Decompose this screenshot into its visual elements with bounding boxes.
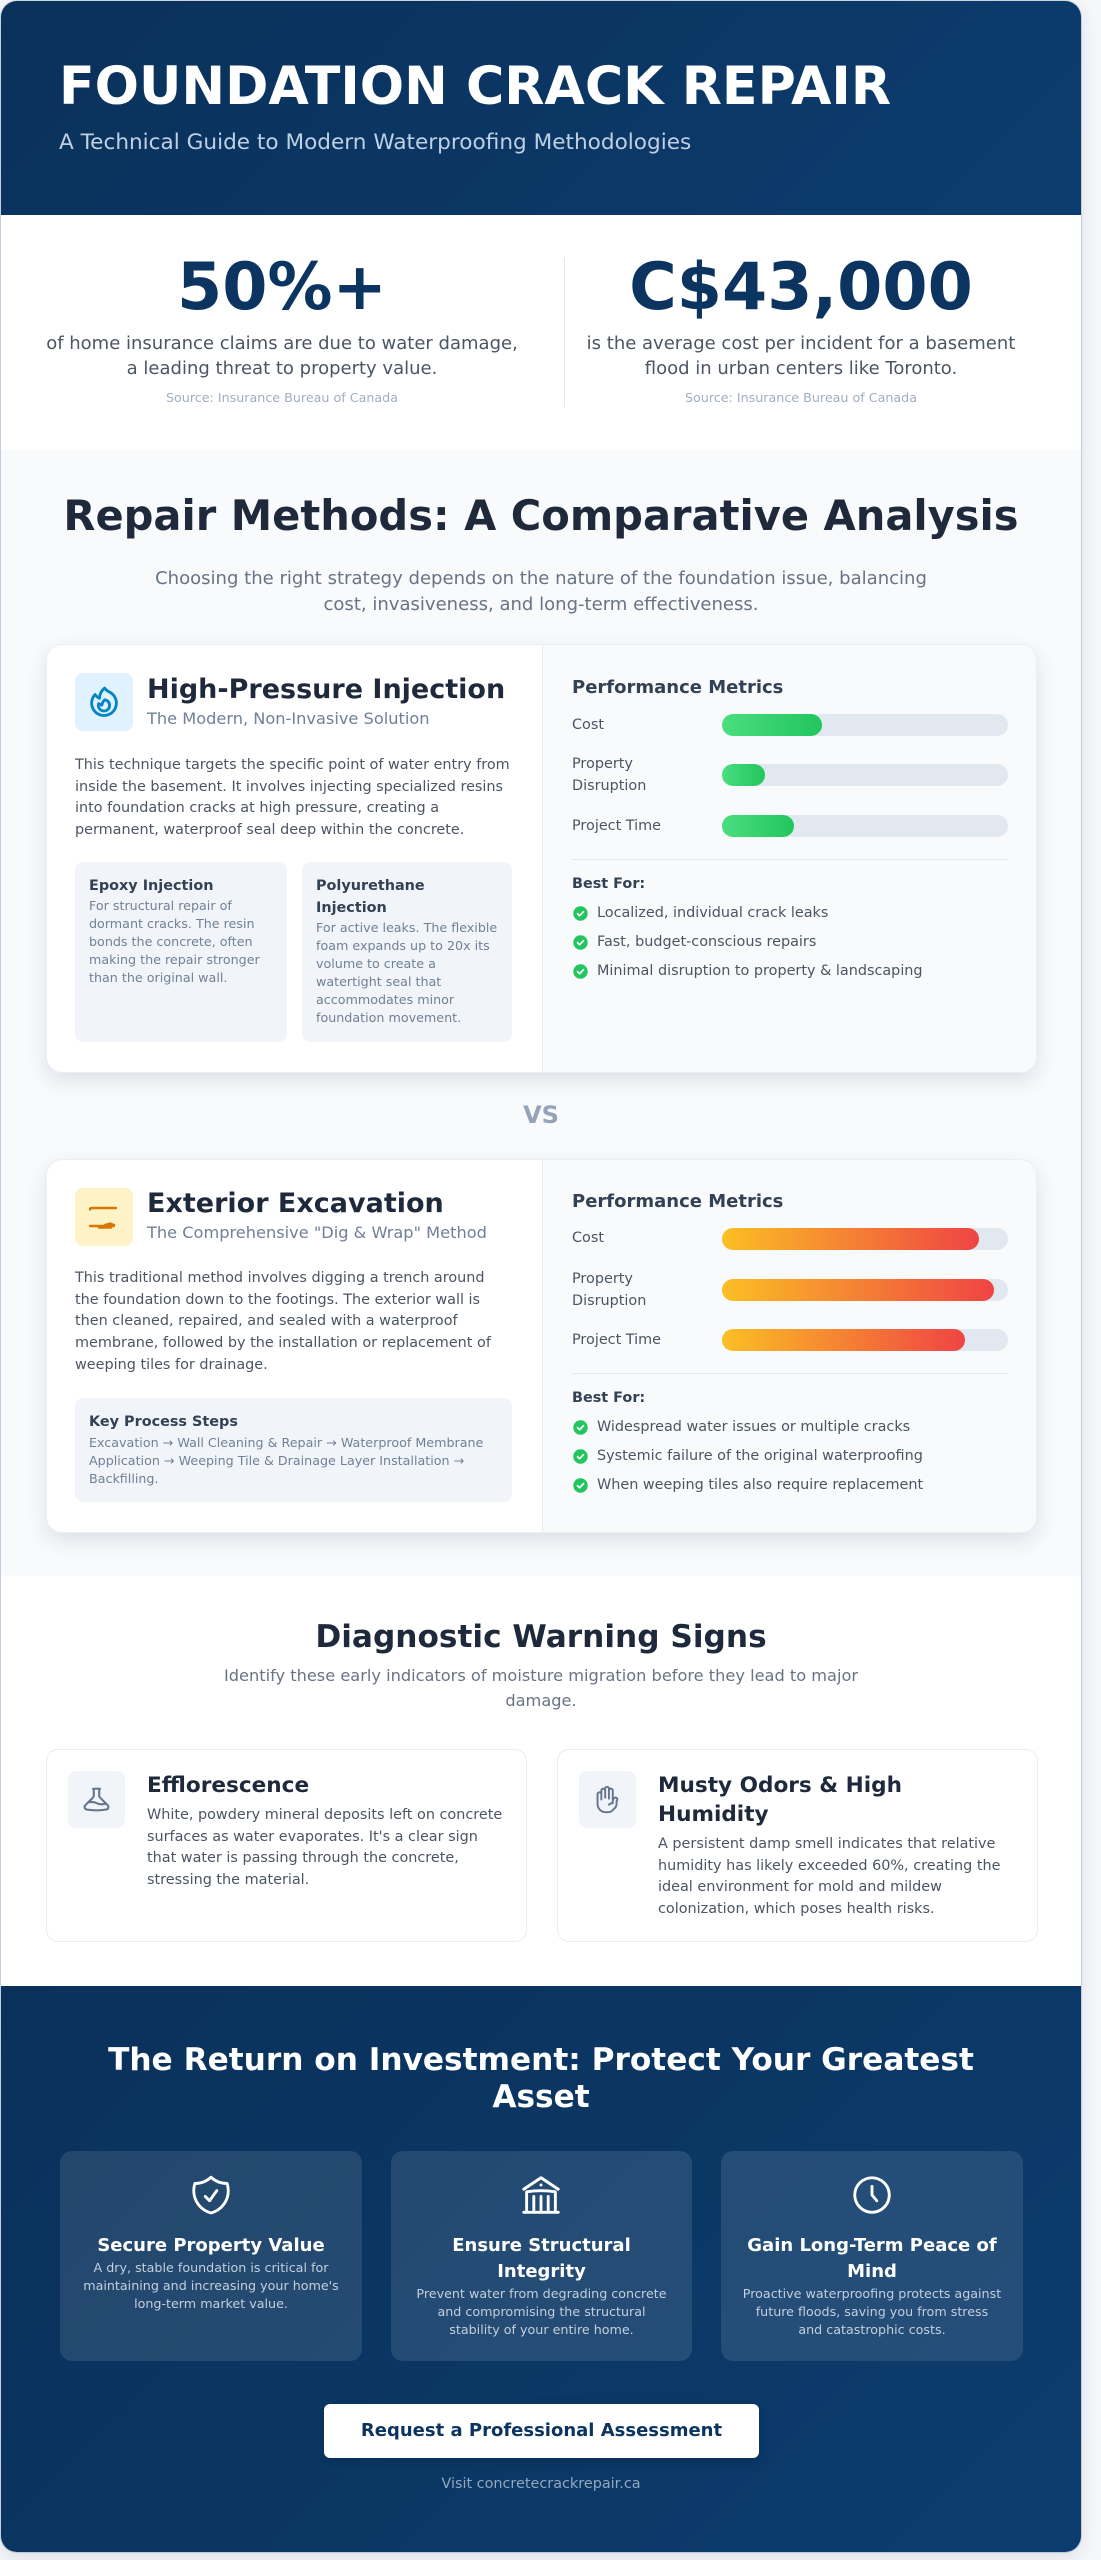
icon: columns building xyxy=(522,2176,560,2214)
bar: property disruption 95% xyxy=(722,1279,1008,1301)
heading: return on investment: Asset xyxy=(492,2078,590,2114)
card text xyxy=(147,1807,502,1888)
heading: return on investment xyxy=(108,2042,974,2114)
method description xyxy=(74,1270,492,1373)
benefit title: Integrity xyxy=(497,2261,586,2282)
sub-card text: For structural repair of xyxy=(89,898,232,913)
metric label: cost: Cost xyxy=(572,717,604,733)
section heading: repair methods: Repair Methods: A Comparative Analysis xyxy=(63,491,1019,540)
benefit text xyxy=(83,2260,339,2311)
benefit text: maintaining and increasing your home's xyxy=(83,2278,339,2293)
sub-card text xyxy=(316,920,497,1025)
sub-card: epoxy injection xyxy=(75,862,287,1042)
sub-card title: Injection xyxy=(316,900,387,916)
sub-card title xyxy=(316,878,425,916)
benefit title: Secure Property Value xyxy=(97,2235,325,2256)
subtitle: A Technical Guide to Modern Waterproofing Methodologies xyxy=(59,130,691,155)
benefit text: Proactive waterproofing protects against xyxy=(743,2286,1001,2301)
card title: High-Pressure Injection xyxy=(147,674,505,705)
sub-card text: watertight seal that xyxy=(316,974,441,989)
benefit: structural integrity xyxy=(391,2151,692,2361)
method description: This traditional method involves digging a trench around xyxy=(75,1270,485,1286)
benefit title xyxy=(747,2235,997,2282)
card text: ideal environment for mold and mildew xyxy=(658,1879,942,1895)
sub-card text: bonds the concrete, often xyxy=(89,934,253,949)
icon: clock xyxy=(853,2176,891,2214)
card text: stressing the material. xyxy=(147,1872,309,1888)
sub-card text: foundation movement. xyxy=(316,1010,461,1025)
stat description: is the average cost per incident for a basement xyxy=(587,333,1015,354)
stat description: of home insurance claims are due to water damage, xyxy=(46,333,518,354)
card title: Efflorescence xyxy=(147,1773,309,1798)
card: high-pressure injection xyxy=(46,644,1037,1073)
icon: flame xyxy=(75,673,133,731)
card text: surfaces as water evaporates. It's a clear sign xyxy=(147,1829,478,1845)
benefit text: future floods, saving you from stress xyxy=(756,2304,988,2319)
benefit title xyxy=(452,2235,631,2282)
benefit: secure property value xyxy=(60,2151,362,2361)
metric label: project time: Project Time xyxy=(572,818,661,834)
heading: return on investment: The Return on Investment: Protect Your Greatest xyxy=(108,2042,974,2078)
best for heading: Best For: xyxy=(572,1390,645,1406)
bar: cost 35% xyxy=(722,714,1008,736)
intro: diagnostic warning signs: Identify these early indicators of moisture migration before they lead to major xyxy=(224,1666,858,1685)
stat source: Source: Insurance Bureau of Canada xyxy=(685,390,917,405)
icon: shield check xyxy=(192,2176,230,2214)
metrics heading: Performance Metrics xyxy=(572,1191,783,1212)
sub-card title: Polyurethane xyxy=(316,878,425,894)
metric label: property disruption: Property xyxy=(572,756,633,772)
best for item: When weeping tiles also require replacement xyxy=(597,1477,923,1493)
method description: permanent, waterproof seal deep within the concrete. xyxy=(75,822,464,838)
sub-card text: volume to create a xyxy=(316,956,436,971)
method description xyxy=(74,757,510,838)
sub-card title: Epoxy Injection xyxy=(89,878,213,894)
sub-card text: Backfilling. xyxy=(89,1471,158,1486)
benefit text: Prevent water from degrading concrete xyxy=(416,2286,667,2301)
panel: return on investment xyxy=(1,1986,1081,2552)
vs divider: VS xyxy=(523,1101,559,1129)
intro: diagnostic warning signs: damage. xyxy=(505,1691,577,1710)
metric label: project time: Project Time xyxy=(572,1332,661,1348)
icon: flask xyxy=(68,1771,125,1828)
card text xyxy=(658,1836,1000,1917)
best for heading: Best For: xyxy=(572,876,645,892)
benefit text: A dry, stable foundation is critical for xyxy=(94,2260,328,2275)
sub-card text: accommodates minor xyxy=(316,992,454,1007)
card title: Musty Odors & High xyxy=(658,1773,902,1798)
benefit: peace of mind xyxy=(721,2151,1023,2361)
section intro: repair methods: cost, invasiveness, and long-term effectiveness. xyxy=(323,594,758,615)
best for item: Fast, budget-conscious repairs xyxy=(597,934,816,950)
bar: project time 85% xyxy=(722,1329,1008,1351)
metrics heading: Performance Metrics xyxy=(572,677,783,698)
benefit text xyxy=(743,2286,1001,2337)
section intro: repair methods xyxy=(155,568,927,615)
metric label: property disruption: Disruption xyxy=(572,778,646,794)
method description: membrane, followed by the installation or replacement of xyxy=(75,1335,491,1351)
header banner xyxy=(1,1,1081,215)
stat: insurance claims xyxy=(46,250,518,405)
panel: repair methods comparison xyxy=(1,450,1081,1576)
stat number: 50%+ xyxy=(177,250,387,325)
card title: Exterior Excavation xyxy=(147,1188,444,1219)
bar: cost 90% xyxy=(722,1228,1008,1250)
metric label: property disruption: Property xyxy=(572,1271,633,1287)
stat description xyxy=(46,333,518,379)
method description: into foundation cracks at high pressure, creating a xyxy=(75,800,439,816)
card text: White, powdery mineral deposits left on concrete xyxy=(147,1807,502,1823)
benefit title: Ensure Structural xyxy=(452,2235,631,2256)
panel: performance metrics xyxy=(542,645,1036,1072)
benefit text: and compromising the structural xyxy=(437,2304,646,2319)
best for item: Systemic failure of the original waterproofing xyxy=(597,1448,923,1464)
card subtitle: The Comprehensive "Dig & Wrap" Method xyxy=(147,1223,487,1242)
card: efflorescence xyxy=(46,1749,527,1942)
bar: project time 25% xyxy=(722,815,1008,837)
sub-card: key process steps xyxy=(75,1398,512,1502)
stat: cost per incident xyxy=(587,250,1015,405)
card text: A persistent damp smell indicates that relative xyxy=(658,1836,995,1852)
best for item: Minimal disruption to property & landscaping xyxy=(597,963,923,979)
sub-card text xyxy=(89,898,260,985)
sub-card text: Excavation → Wall Cleaning & Repair → Waterproof Membrane xyxy=(89,1435,483,1450)
best for item: Localized, individual crack leaks xyxy=(597,905,828,921)
card text: colonization, which poses health risks. xyxy=(658,1901,935,1917)
stat number: C$43,000 xyxy=(629,250,973,325)
button: request assessment xyxy=(324,2404,759,2458)
sub-card text xyxy=(89,1435,483,1486)
method description: then cleaned, repaired, and sealed with a waterproof xyxy=(75,1313,458,1329)
metric label: property disruption xyxy=(572,1271,646,1309)
bar: property disruption 15% xyxy=(722,764,1008,786)
title: FOUNDATION CRACK REPAIR xyxy=(59,57,891,117)
stat description: flood in urban centers like Toronto. xyxy=(645,358,957,379)
intro: diagnostic warning signs xyxy=(224,1666,858,1710)
benefit text: long-term market value. xyxy=(134,2296,288,2311)
website link: Visit concretecrackrepair.ca xyxy=(441,2476,641,2492)
sub-card text: Application → Weeping Tile & Drainage Layer Installation → xyxy=(89,1453,464,1468)
method description: weeping tiles for drainage. xyxy=(75,1357,268,1373)
best for item: Widespread water issues or multiple cracks xyxy=(597,1419,910,1435)
benefit title: Mind xyxy=(847,2261,897,2282)
statistics band xyxy=(1,215,1081,450)
icon: excavation tool xyxy=(75,1188,133,1246)
metric label: property disruption: Disruption xyxy=(572,1293,646,1309)
button: request assessment: Request a Professional Assessment xyxy=(361,2420,722,2441)
benefit text: stability of your entire home. xyxy=(449,2322,634,2337)
section intro: repair methods: Choosing the right strategy depends on the nature of the foundation issue, balancing xyxy=(155,568,927,589)
sub-card title: Key Process Steps xyxy=(89,1414,238,1430)
sub-card text: foam expands up to 20x its xyxy=(316,938,490,953)
metric label: property disruption xyxy=(572,756,646,794)
metric label: cost: Cost xyxy=(572,1230,604,1246)
benefit text: and catastrophic costs. xyxy=(798,2322,946,2337)
method description: inside the basement. It involves injecting specialized resins xyxy=(75,779,503,795)
card title: Humidity xyxy=(658,1802,769,1827)
card text: that water is passing through the concrete, xyxy=(147,1850,459,1866)
benefit text xyxy=(416,2286,667,2337)
heading: diagnostic warning signs: Diagnostic Warning Signs xyxy=(315,1619,767,1655)
card title xyxy=(658,1773,902,1827)
panel: performance metrics xyxy=(542,1160,1036,1532)
method description: the foundation down to the footings. The exterior wall is xyxy=(75,1292,480,1308)
stat description: a leading threat to property value. xyxy=(127,358,437,379)
card subtitle: The Modern, Non-Invasive Solution xyxy=(147,709,429,728)
stat description xyxy=(587,333,1015,379)
sub-card text: making the repair stronger xyxy=(89,952,260,967)
icon: hand xyxy=(579,1771,636,1828)
benefit title: Gain Long-Term Peace of xyxy=(747,2235,997,2256)
sub-card text: than the original wall. xyxy=(89,970,227,985)
sub-card text: dormant cracks. The resin xyxy=(89,916,255,931)
stat source: Source: Insurance Bureau of Canada xyxy=(166,390,398,405)
card: musty odors xyxy=(557,1749,1038,1942)
method description: This technique targets the specific point of water entry from xyxy=(75,757,510,773)
card text: humidity has likely exceeded 60%, creating the xyxy=(658,1858,1000,1874)
card: exterior excavation xyxy=(46,1159,1037,1533)
sub-card: polyurethane injection xyxy=(302,862,512,1042)
sub-card text: For active leaks. The flexible xyxy=(316,920,497,935)
